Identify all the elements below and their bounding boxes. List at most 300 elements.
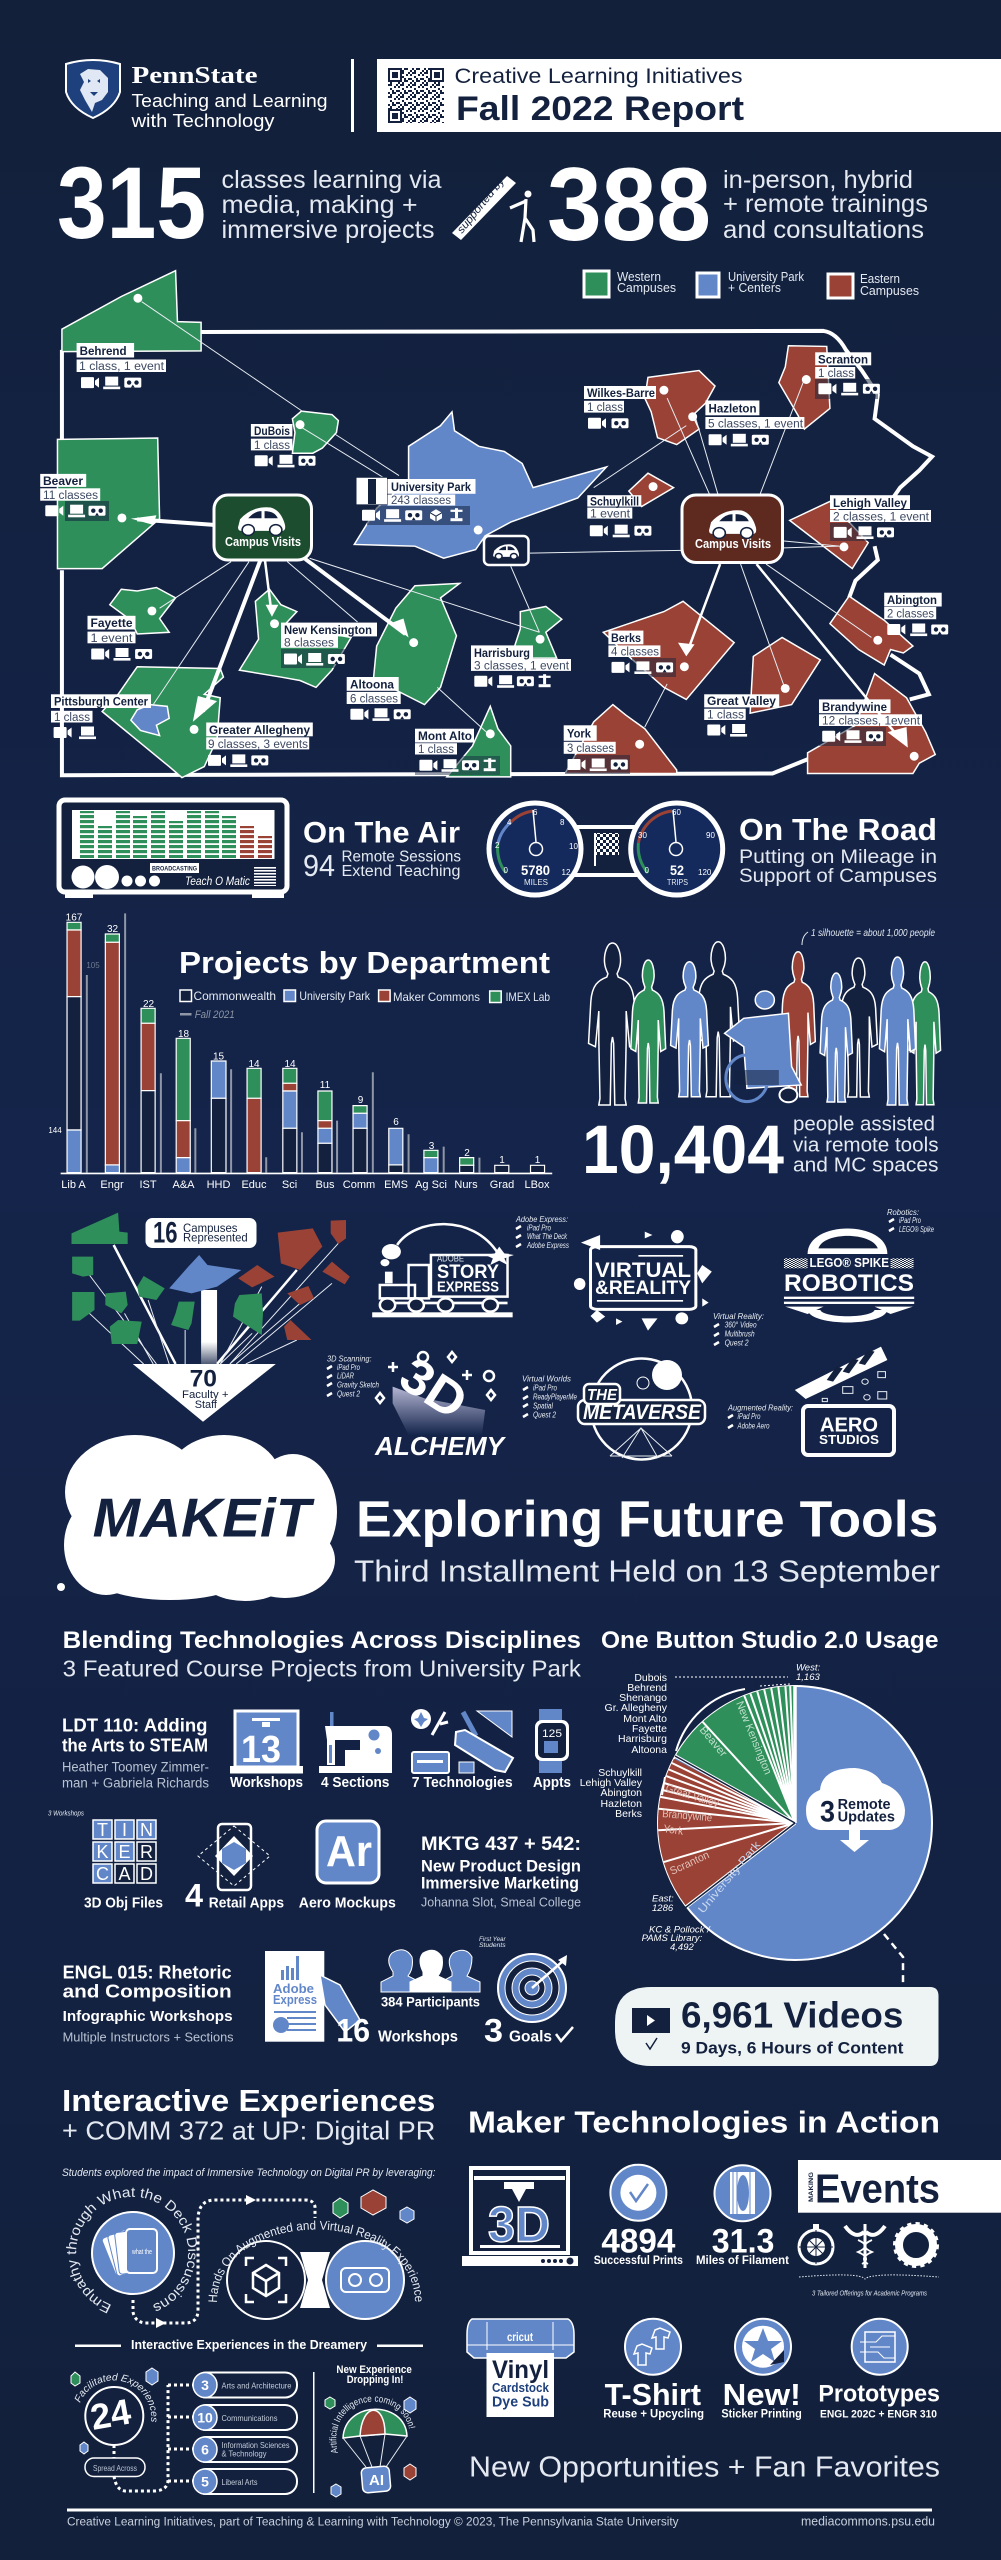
- campus label: Great Valley: Great Valley: [707, 694, 776, 708]
- callouts: pie totals: 1286: [652, 1903, 674, 1914]
- heading: Interactive Experiences: [62, 2083, 435, 2145]
- west campus labels: Shenango: [619, 1692, 667, 1704]
- bar value labels: 11: [320, 1080, 331, 1091]
- list: 3D Scanning tools: LiDAR: [337, 1372, 354, 1381]
- text block: On The Air: On The Air: [303, 817, 460, 850]
- list: Virtual Reality tools: Quest 2: [725, 1338, 749, 1347]
- east campus labels: Berks: [615, 1808, 642, 1820]
- icon: Tinkercad grid: I: [122, 1820, 127, 1840]
- subheading: Dreamery: Interactive Experiences in the Dreamery: [131, 2337, 368, 2352]
- icon: Adobe Express document: Express: [273, 1992, 317, 2007]
- list: Augmented Reality tools: Augmented Reality:: [727, 1404, 793, 1413]
- icon: 3D printer workshops: Workshops: [230, 1774, 303, 1791]
- funnel: 70 faculty and staff: Faculty +: [182, 1389, 228, 1401]
- icon: Adobe Express document: [265, 1951, 360, 2042]
- gauge: miles: 6: [533, 808, 538, 817]
- campus label: Greater Allegheny: [206, 722, 313, 767]
- wedge labels: [662, 1700, 774, 1916]
- campus label: Altoona: 6 classes: [350, 694, 398, 706]
- level bars: [80, 811, 272, 858]
- stat: T-Shirt reuse: Reuse + Upcycling: [603, 2406, 704, 2420]
- text block: On The Road: Putting on Mileage in: [739, 846, 937, 868]
- campus label: Great Valley: [704, 694, 779, 737]
- campus label: Harrisburg: 3 classes, 1 event: [474, 660, 570, 672]
- panel: LDT 110 course: LDT 110: Adding: [62, 1716, 208, 1736]
- icon: sewing machine: 4 Sections: [321, 1774, 389, 1791]
- icon: Teach O Matic radio: Teach O Matic: [185, 876, 250, 888]
- icon: 3D printer workshops: 13: [241, 1729, 281, 1771]
- bar category labels: Sci: [282, 1179, 297, 1191]
- parachute: AI coming soon: New Experience: [336, 2364, 412, 2376]
- stat: 10,404 people assisted: people assisted: [793, 1113, 935, 1136]
- logo: 3D Alchemy: ALCHEMY: [374, 1431, 507, 1461]
- icon: Tinkercad grid: 3 Workshops: [48, 1811, 84, 1818]
- wedge labels: Scranton: [668, 1849, 711, 1878]
- campus label: Mont Alto: 1 class: [418, 744, 454, 756]
- callouts: pie totals: East:: [652, 1894, 674, 1905]
- bar value labels: 18: [178, 1029, 189, 1040]
- icon: Cricut machine: cricut: [507, 2330, 533, 2344]
- heading: Exploring Future Tools: Exploring Future Tools: [356, 1491, 938, 1548]
- panel: LDT 110 course: the Arts to STEAM: [62, 1736, 208, 1756]
- text block: On The Road: [739, 812, 937, 887]
- icon: sewing machine: [319, 1712, 392, 1791]
- icon: phone with AR cube: [185, 1824, 284, 1914]
- campus label: Schuylkill: [587, 494, 651, 537]
- icon: car: [238, 507, 285, 535]
- campus label: Scranton: 1 class: [818, 368, 854, 380]
- header logo: Penn State: [66, 60, 328, 131]
- logo: Adobe Story Express: [372, 1224, 514, 1317]
- bar value labels: 15: [213, 1052, 224, 1062]
- west campus labels: Dubois: [634, 1672, 667, 1684]
- gauge: trips: 120: [698, 868, 712, 877]
- campus label: Berks: Berks: [611, 631, 641, 645]
- headline stat: 315 classes: media, making +: [222, 191, 418, 219]
- icon: 384 participants: 16: [336, 2013, 370, 2049]
- icon: cloud with 3 remote updates: Remote: [838, 1797, 891, 1813]
- headline stat: 315 classes: 315: [57, 146, 206, 260]
- icon: 3D printer: [462, 2168, 578, 2266]
- campus label: Mont Alto: [415, 729, 500, 775]
- icon: target goals: [484, 1954, 573, 2049]
- west campus labels: Altoona: [631, 1744, 667, 1756]
- bar value labels: 32: [107, 924, 118, 935]
- map legend: Eastern: [860, 272, 900, 286]
- panel: red campus visits hub: Campus Visits: [695, 536, 771, 551]
- campus label: Pittsburgh Center: Pittsburgh Center: [54, 694, 148, 708]
- gauge: miles: 5780: [521, 863, 550, 878]
- parachute: AI coming soon: Dropping In!: [347, 2374, 404, 2386]
- icon: checkered flag: [594, 833, 619, 866]
- stat: 10,404 people assisted: via remote tools: [793, 1134, 938, 1157]
- icon: phone with AR cube: Retail Apps: [209, 1894, 284, 1911]
- campus label: Mont Alto: Mont Alto: [418, 729, 472, 743]
- logo: The Metaverse: METAVERSE: [583, 1401, 702, 1424]
- wedge labels: York: [663, 1823, 685, 1838]
- logo: Adobe Story Express: ADOBE: [437, 1254, 464, 1265]
- campus label: Scranton: Scranton: [818, 352, 868, 366]
- panel: green campus visits hub: Campus Visits: [225, 534, 301, 549]
- list: Adobe Express tools: iPad Pro: [527, 1224, 551, 1233]
- headline stat: 388 trainings: [547, 147, 928, 263]
- icon: 3D printer: 3D: [488, 2197, 550, 2253]
- circles: AR and VR experiences: Hands On Augmented and Virtual Reality Experiences: [208, 2220, 422, 2302]
- gauge: miles: 10: [569, 842, 578, 851]
- MAKEiT cloud logo: MAKEiT: [93, 1487, 315, 1549]
- icon: person holding supported by sign: supported by: [455, 174, 508, 236]
- pill: Information Sciences: [193, 2437, 297, 2462]
- logo: 3D Alchemy: [374, 1346, 507, 1461]
- campus label: Hazleton: 5 classes, 1 event: [708, 418, 804, 430]
- campus label: DuBois: [251, 424, 316, 467]
- gauge: miles: 8: [560, 818, 565, 827]
- campus label: Greater Allegheny: 9 classes, 3 events: [208, 739, 308, 751]
- east campus labels: Abington: [601, 1787, 642, 1799]
- pill: Arts and Architecture: Arts and Architecture: [222, 2380, 292, 2390]
- campus label: New Kensington: 8 classes: [284, 638, 334, 650]
- bar category labels: IST: [139, 1179, 157, 1191]
- icon: cloud with 3 remote updates: Updates: [838, 1810, 895, 1826]
- logo: Adobe Story Express: STORY: [437, 1262, 499, 1283]
- logo: LEGO Spike Robotics: ROBOTICS: [784, 1270, 914, 1297]
- list: Virtual Worlds tools: Virtual Worlds: [522, 1375, 571, 1384]
- campus label: Beaver: Beaver: [43, 474, 83, 488]
- text block: On The Road: Support of Campuses: [739, 865, 937, 887]
- panel: ENGL 015 course: ENGL 015: Rhetoric: [63, 1962, 232, 1982]
- campus label: Lehigh Valley: [830, 495, 931, 541]
- text block: On The Air: Extend Teaching: [342, 863, 460, 880]
- gauges: miles and trips: [489, 803, 723, 895]
- panel: ENGL 015 course: Infographic Workshops: [63, 2008, 233, 2025]
- logo: The Metaverse: THE: [587, 1387, 618, 1404]
- list: Robotics tools: Robotics:: [887, 1208, 919, 1217]
- bar value labels: 2: [464, 1148, 470, 1159]
- campus label: Great Valley: 1 class: [707, 710, 744, 722]
- logo: Virtual Reality: [574, 1230, 712, 1331]
- gauge: miles: [489, 803, 581, 895]
- stat: New sticker printing: [721, 2319, 802, 2420]
- icon: car: [709, 510, 756, 538]
- logo: Virtual Reality: &REALITY: [595, 1277, 691, 1299]
- list: Adobe Express tools: Adobe Express: [526, 1241, 569, 1250]
- panel: green campus visits hub: [214, 495, 312, 560]
- stat: 10,404 people assisted: [582, 1111, 938, 1188]
- list: 3D Scanning tools: 3D Scanning:: [327, 1355, 372, 1364]
- panel: ENGL 015 course: [63, 1936, 573, 2049]
- bar category labels: Bus: [316, 1179, 335, 1191]
- list: Virtual Reality tools: Virtual Reality:: [713, 1312, 764, 1321]
- stat: New sticker printing: Sticker Printing: [721, 2406, 802, 2420]
- panel: Tinkercad and retail apps: [48, 1811, 581, 1914]
- gauge: trips: 90: [706, 831, 715, 840]
- campus label: Behrend: [77, 343, 166, 389]
- list: Augmented Reality tools: Adobe Aero: [737, 1421, 770, 1430]
- pill: Information Sciences: 6: [201, 2442, 209, 2458]
- text block: MKTG 437 + 542: New Product Design: [421, 1858, 581, 1876]
- campus label: Brandywine: [819, 699, 922, 746]
- headline stat: 388 trainings: and consultations: [723, 216, 924, 244]
- icon: smartwatch apps: 125: [542, 1728, 562, 1740]
- bar value labels: 9: [358, 1095, 364, 1106]
- bar value labels: 22: [143, 999, 154, 1010]
- stat: 10,404 people assisted: 10,404: [582, 1111, 784, 1188]
- callout card: 6,961 videos: 9 Days, 6 Hours of Content: [681, 2039, 904, 2057]
- stat: Prototypes: ENGL 202C + ENGR 310: [820, 2408, 937, 2420]
- logo: 3D Alchemy: 3D: [390, 1346, 478, 1430]
- icon: Teach O Matic radio: BROADCASTING: [152, 866, 197, 872]
- west campus labels: Harrisburg: [618, 1733, 667, 1745]
- badge: 24 facilitated experiences: 24: [87, 2391, 134, 2438]
- header logo: Penn State: PennState: [132, 63, 258, 89]
- logo: Aero Studios: AERO: [820, 1414, 878, 1437]
- icon: Adobe Aero: [299, 1821, 396, 1911]
- bar value labels: 6: [393, 1117, 399, 1128]
- list: Virtual Reality tools: Multibrush: [725, 1330, 755, 1339]
- panel: LDT 110 course: man + Gabriela Richards: [62, 1775, 209, 1790]
- pill: Arts and Architecture: 3: [201, 2377, 209, 2393]
- list: 3D Scanning tools: Quest 2: [337, 1390, 360, 1399]
- wedge group: eastern campuses: [658, 1759, 795, 1905]
- campus label: Harrisburg: [471, 645, 571, 688]
- campus label: DuBois: 1 class: [254, 440, 290, 452]
- bar value labels: 105: [86, 961, 100, 970]
- header logo: Penn State: with Technology: [130, 110, 275, 131]
- headline stat: 315 classes: immersive projects: [222, 216, 434, 244]
- bar value labels: 3: [429, 1141, 435, 1152]
- campus label: Beaver: [40, 474, 109, 521]
- campus label: Brandywine: 12 classes, 1event: [822, 716, 921, 728]
- chart legend: University Park: [299, 989, 371, 1003]
- icon: Nittany lion shield: [66, 60, 120, 118]
- panel: Interactive Experiences in the Dreamery: [70, 2337, 423, 2498]
- heading: Blending Technologies: [63, 1627, 581, 1682]
- map legend: Campuses: [617, 281, 676, 295]
- gauge: trips: 60: [672, 808, 681, 817]
- pill: Information Sciences: Information Sciences: [222, 2440, 290, 2450]
- logo: LEGO Spike Robotics: LEGO® SPIKE: [810, 1256, 889, 1270]
- campus label: Lehigh Valley: Lehigh Valley: [833, 496, 907, 510]
- campus label: York: York: [567, 726, 591, 740]
- campus label: University Park: 243 classes: [391, 495, 451, 507]
- report title banner: Fall 2022 Report: [456, 90, 745, 128]
- stat: Prototypes: Prototypes: [818, 2381, 940, 2408]
- stat: T-Shirt reuse: T-Shirt: [605, 2377, 701, 2412]
- icon: Tinkercad grid: [48, 1811, 163, 1911]
- panel: LDT 110 course: [62, 1709, 571, 1791]
- pill: Information Sciences: & Technology: [222, 2448, 267, 2458]
- headline stat: 315 classes: [57, 146, 442, 260]
- logo: Aero Studios: [795, 1347, 894, 1455]
- chart legend: Maker Commons: [393, 990, 480, 1004]
- pie chart: One Button Studio usage: [580, 1663, 932, 1987]
- campus label: Fayette: 1 event: [90, 633, 133, 645]
- diagram: 16 campuses into 70 faculty funnel: [72, 1213, 350, 1422]
- wheelchair user: [725, 991, 801, 1102]
- funnel: 70 faculty and staff: Staff: [195, 1399, 218, 1411]
- campus label: Wilkes-Barre: [584, 386, 656, 429]
- bar category labels: Ag Sci: [415, 1179, 447, 1191]
- campus label: York: 3 classes: [567, 743, 614, 755]
- icon: Tinkercad grid: D: [140, 1864, 153, 1884]
- callouts: pie totals: KC & Pollock /: [649, 1925, 711, 1936]
- bar category labels: [61, 1179, 550, 1191]
- bar category labels: A&A: [172, 1179, 195, 1191]
- icon: Tinkercad grid: K: [96, 1842, 109, 1862]
- campus label: Altoona: Altoona: [350, 678, 394, 692]
- stat: 10,404 people assisted: and MC spaces: [793, 1154, 938, 1177]
- panel: red campus visits hub: [682, 495, 782, 562]
- report title banner: Creative Learning Initiatives: [454, 64, 742, 88]
- note: silhouette scale: [802, 928, 935, 945]
- wedge labels: Great Valley: [664, 1782, 721, 1810]
- icon: Tinkercad grid: 3D Obj Files: [84, 1894, 163, 1911]
- text block: MKTG 437 + 542: Immersive Marketing: [421, 1874, 579, 1892]
- icon: caduceus: [845, 2224, 885, 2268]
- headline stat: 388 trainings: 388: [547, 147, 711, 263]
- MAKEiT cloud logo: [57, 1435, 337, 1601]
- heading: Maker Technologies in Action: Maker Technologies in Action: [468, 2105, 940, 2140]
- map shapes: [57, 271, 935, 778]
- campus label: Berks: 4 classes: [611, 646, 659, 658]
- panel: Making Events: MAKING: [808, 2172, 815, 2202]
- badge: 24 facilitated experiences: Facilitated Experiences: [74, 2373, 156, 2422]
- icon: 3D printer workshops: [230, 1711, 303, 1791]
- icon: Adobe Aero: Aero Mockups: [299, 1894, 396, 1911]
- footer: mediacommons.psu.edu: [801, 2515, 935, 2529]
- stat: 4894 successful prints: 4894: [601, 2222, 675, 2260]
- stat: 31.3 miles of filament: 31.3: [712, 2222, 774, 2260]
- gauge: miles: MILES: [524, 878, 548, 887]
- stat: T-Shirt reuse: [603, 2319, 704, 2420]
- panel: ENGL 015 course: Multiple Instructors + Sections: [63, 2031, 234, 2045]
- list: Robotics tools: [887, 1208, 934, 1234]
- bar category labels: Lib A: [61, 1179, 86, 1191]
- heading: Blending Technologies: 3 Featured Course Projects from University Park: [63, 1656, 581, 1682]
- campus label: Fayette: Fayette: [90, 616, 133, 630]
- wedge labels: Brandywine: [662, 1808, 713, 1824]
- circle: What the Deck discussions: Empathy through What the Deck Discussions: [66, 2188, 198, 2314]
- list: Virtual Reality tools: [713, 1312, 764, 1347]
- wedge labels: Beaver: [697, 1724, 729, 1760]
- map legend: [584, 270, 919, 298]
- panel: Making Events: 3 Tailored Offerings for Academic Programs: [812, 2291, 927, 2298]
- panel: LDT 110 course: Heather Toomey Zimmer-: [62, 1760, 209, 1775]
- gauge: miles: 0: [504, 866, 508, 875]
- bar value labels: [48, 912, 541, 1166]
- list: Adobe Express tools: What The Deck: [527, 1232, 568, 1241]
- bar category labels: Comm: [343, 1179, 375, 1191]
- text block: On The Road: On The Road: [739, 812, 937, 847]
- bar category labels: Educ: [241, 1179, 267, 1191]
- icon: 384 participants: 384 Participants: [381, 1995, 480, 2010]
- icon: Tinkercad grid: E: [118, 1842, 131, 1862]
- campus label: Brandywine: Brandywine: [822, 700, 887, 714]
- icon: Cricut machine: Dye Sub: [492, 2395, 549, 2411]
- caption: New Opportunities: New Opportunities + Fan Favorites: [469, 2452, 940, 2484]
- icon: Tinkercad grid: N: [140, 1820, 153, 1840]
- east campus labels: Hazleton: [601, 1798, 642, 1810]
- wedge labels: University Park: [696, 1839, 764, 1916]
- campus label: Hazleton: Hazleton: [708, 402, 756, 416]
- east campus labels: [580, 1767, 643, 1820]
- text block: MKTG 437 + 542: [421, 1834, 581, 1910]
- list: Adobe Express tools: [515, 1215, 569, 1250]
- campus label: DuBois: DuBois: [254, 424, 290, 438]
- gauge: trips: 0: [644, 866, 650, 875]
- list: Virtual Worlds tools: ReadyPlayerMe: [533, 1392, 577, 1401]
- callouts: pie totals: PAMS Library:: [642, 1933, 702, 1944]
- footer: Creative Learning Initiatives, part of Teaching & Learning with Technology © 2023, The Pennsylvania State University: [67, 2517, 679, 2529]
- chart legend: Commonwealth: [194, 989, 276, 1003]
- stat: Prototypes: [818, 2319, 940, 2420]
- bar category labels: LBox: [524, 1179, 550, 1191]
- badge: 16 campuses represented: Campuses: [183, 1221, 238, 1235]
- bar value labels: 1: [535, 1155, 541, 1166]
- text block: On The Air: [303, 817, 461, 883]
- icon: Tinkercad grid: T: [97, 1820, 108, 1840]
- west campus labels: Mont Alto: [623, 1713, 667, 1725]
- logo: Aero Studios: STUDIOS: [819, 1432, 879, 1447]
- logo: Virtual Reality: VIRTUAL: [595, 1259, 691, 1282]
- callout card: 6,961 videos: 6,961 Videos: [681, 1995, 903, 2036]
- gauge: miles: 4: [507, 818, 512, 827]
- icon: target goals: Goals: [509, 2029, 552, 2046]
- icon: Teach O Matic radio: [59, 800, 287, 898]
- icon: Adobe Aero: Ar: [326, 1827, 372, 1876]
- bar value labels: 1: [499, 1155, 505, 1166]
- stat: 31.3 miles of filament: [696, 2165, 789, 2267]
- pill: Communications: 10: [197, 2410, 213, 2426]
- badge: 16 campuses represented: [146, 1217, 256, 1250]
- heading: Interactive Experiences: + COMM 372 at UP: Digital PR: [62, 2115, 435, 2145]
- text block: On The Air: 94: [303, 848, 335, 883]
- badge: 16 campuses represented: Represented: [183, 1231, 248, 1245]
- icon: Tinkercad grid: R: [140, 1842, 153, 1862]
- east campus labels: Lehigh Valley: [580, 1777, 643, 1789]
- bar category labels: Grad: [490, 1179, 514, 1191]
- campus label: Fayette: [88, 616, 152, 661]
- gauge: trips: 30: [638, 831, 647, 840]
- icon: 384 participants: Students: [479, 1942, 506, 1949]
- header logo: Penn State: Teaching and Learning: [132, 90, 328, 111]
- list: Virtual Worlds tools: Spatial: [533, 1401, 553, 1410]
- footer: [67, 2508, 935, 2529]
- text block: MKTG 437 + 542: Johanna Slot, Smeal College: [421, 1895, 581, 1910]
- pill: Liberal Arts: Liberal Arts: [222, 2477, 258, 2487]
- icon: Cricut machine: [467, 2319, 574, 2417]
- campus label: University Park: University Park: [391, 480, 471, 494]
- gauge: miles: 2: [495, 841, 500, 850]
- icon: person holding supported by sign: [452, 174, 534, 242]
- campus label: Hazleton: [705, 400, 804, 446]
- stat: 31.3 miles of filament: Miles of Filament: [696, 2253, 789, 2267]
- callouts: pie totals: 4,492: [670, 1942, 694, 1953]
- campus label: Beaver: 11 classes: [43, 490, 98, 502]
- pill: Communications: [193, 2405, 297, 2430]
- bar category labels: EMS: [384, 1179, 408, 1191]
- list: Virtual Worlds tools: Quest 2: [533, 1410, 556, 1419]
- headline stat: 315 classes: classes learning via: [222, 166, 442, 194]
- list: Virtual Worlds tools: [522, 1375, 577, 1419]
- report title banner: [377, 59, 1001, 132]
- icon: cloud with 3 remote updates: 3: [820, 1796, 835, 1829]
- list: 3D Scanning tools: Gravity Sketch: [337, 1380, 379, 1389]
- list: Robotics tools: iPad Pro: [899, 1216, 921, 1225]
- badge: 24 facilitated experiences: Spread Across: [93, 2463, 137, 2473]
- pill: Liberal Arts: 5: [201, 2474, 209, 2490]
- logo: LEGO Spike Robotics: [784, 1228, 914, 1322]
